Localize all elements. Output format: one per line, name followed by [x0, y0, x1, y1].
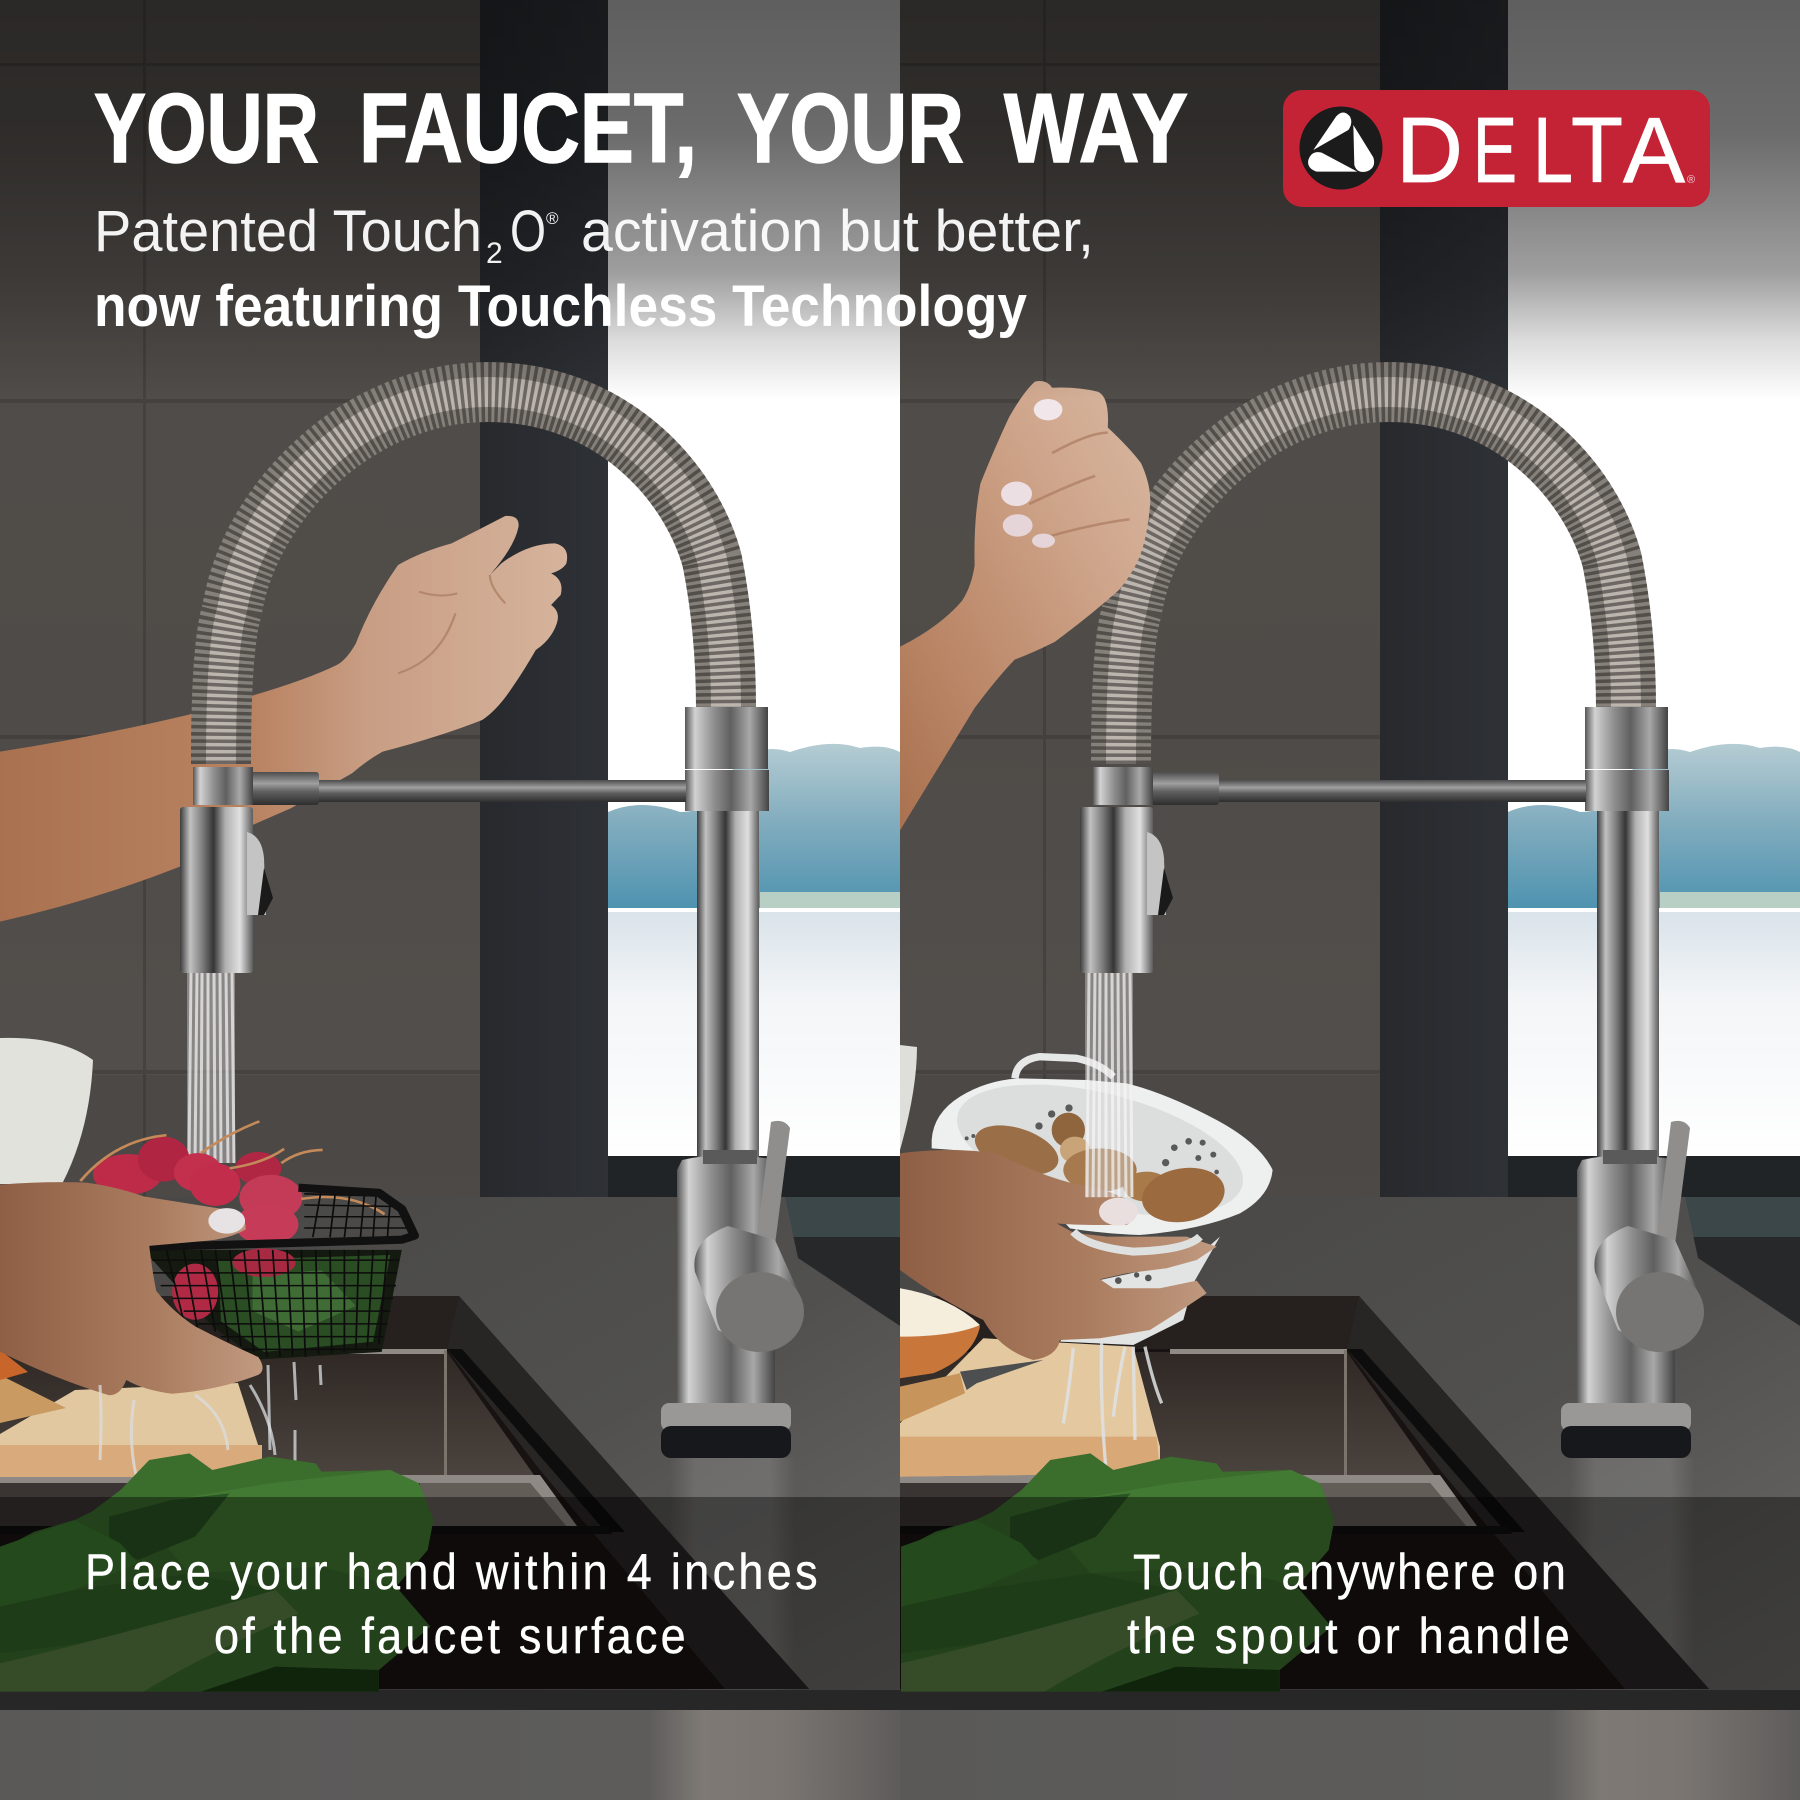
title: FAUCET, [359, 73, 697, 183]
subtitle line one [94, 199, 1094, 270]
caption: right: Touch anywhere on [1133, 1545, 1566, 1601]
subtitle line two: now featuring Touchless Technology [94, 274, 1027, 339]
icon: white bowl [0, 1038, 93, 1184]
title: WAY [1004, 73, 1188, 183]
basket with radishes [80, 1121, 414, 1360]
water drips: left [100, 1362, 321, 1475]
icon: white colander with mushrooms [932, 1057, 1273, 1345]
caption: left: Place your hand within 4 inches [85, 1545, 818, 1601]
logo: Delta: ® [1687, 174, 1695, 186]
top gradient overlay on windows [608, 0, 1800, 400]
hand: left hand hovering near faucet [0, 516, 567, 922]
subtitle line one: Patented Touch [94, 199, 482, 264]
icon: sliver of bowl in right panel [900, 1045, 917, 1150]
logo: Delta: E [1473, 98, 1517, 202]
top gradient overlay on walls [0, 0, 1508, 400]
logo: Delta: T [1571, 98, 1623, 202]
caption: right: the spout or handle [1127, 1609, 1570, 1665]
icon: left cutting board [0, 1350, 262, 1477]
title [94, 73, 1188, 183]
panel: left photo background [0, 0, 900, 1800]
caption: right [1127, 1545, 1570, 1665]
logo: Delta: A [1623, 98, 1685, 202]
caption bar: right [900, 1497, 1800, 1710]
caption: left: of the faucet surface [214, 1609, 686, 1665]
icon: right cutting board, onion and knife [900, 1288, 1160, 1477]
hand: right hand holding colander [900, 1150, 1217, 1360]
water stream: left [187, 973, 235, 1163]
caption bar: left [0, 1497, 900, 1710]
faucet: left [180, 392, 804, 1458]
logo: Delta: D [1396, 98, 1463, 202]
logo: Delta: L [1533, 98, 1573, 202]
hand: left hand holding basket [0, 1182, 263, 1395]
title: YOUR [737, 73, 964, 183]
panel: right photo background [900, 0, 1800, 1800]
subtitle line one: ® [546, 209, 559, 228]
water drips: right [1063, 1342, 1162, 1477]
subtitle line one: 2 [486, 237, 503, 270]
water stream: right [1085, 973, 1133, 1197]
hand: right hand touching spout [900, 381, 1150, 830]
title: YOUR [94, 73, 319, 183]
lettuce: right [901, 1453, 1334, 1692]
logo: Delta [1283, 90, 1710, 207]
subtitle line one: activation but better, [581, 199, 1094, 264]
faucet: right [1080, 392, 1704, 1458]
subtitle line one: O [510, 199, 546, 264]
caption: left [85, 1545, 818, 1665]
lettuce: left [0, 1453, 433, 1692]
